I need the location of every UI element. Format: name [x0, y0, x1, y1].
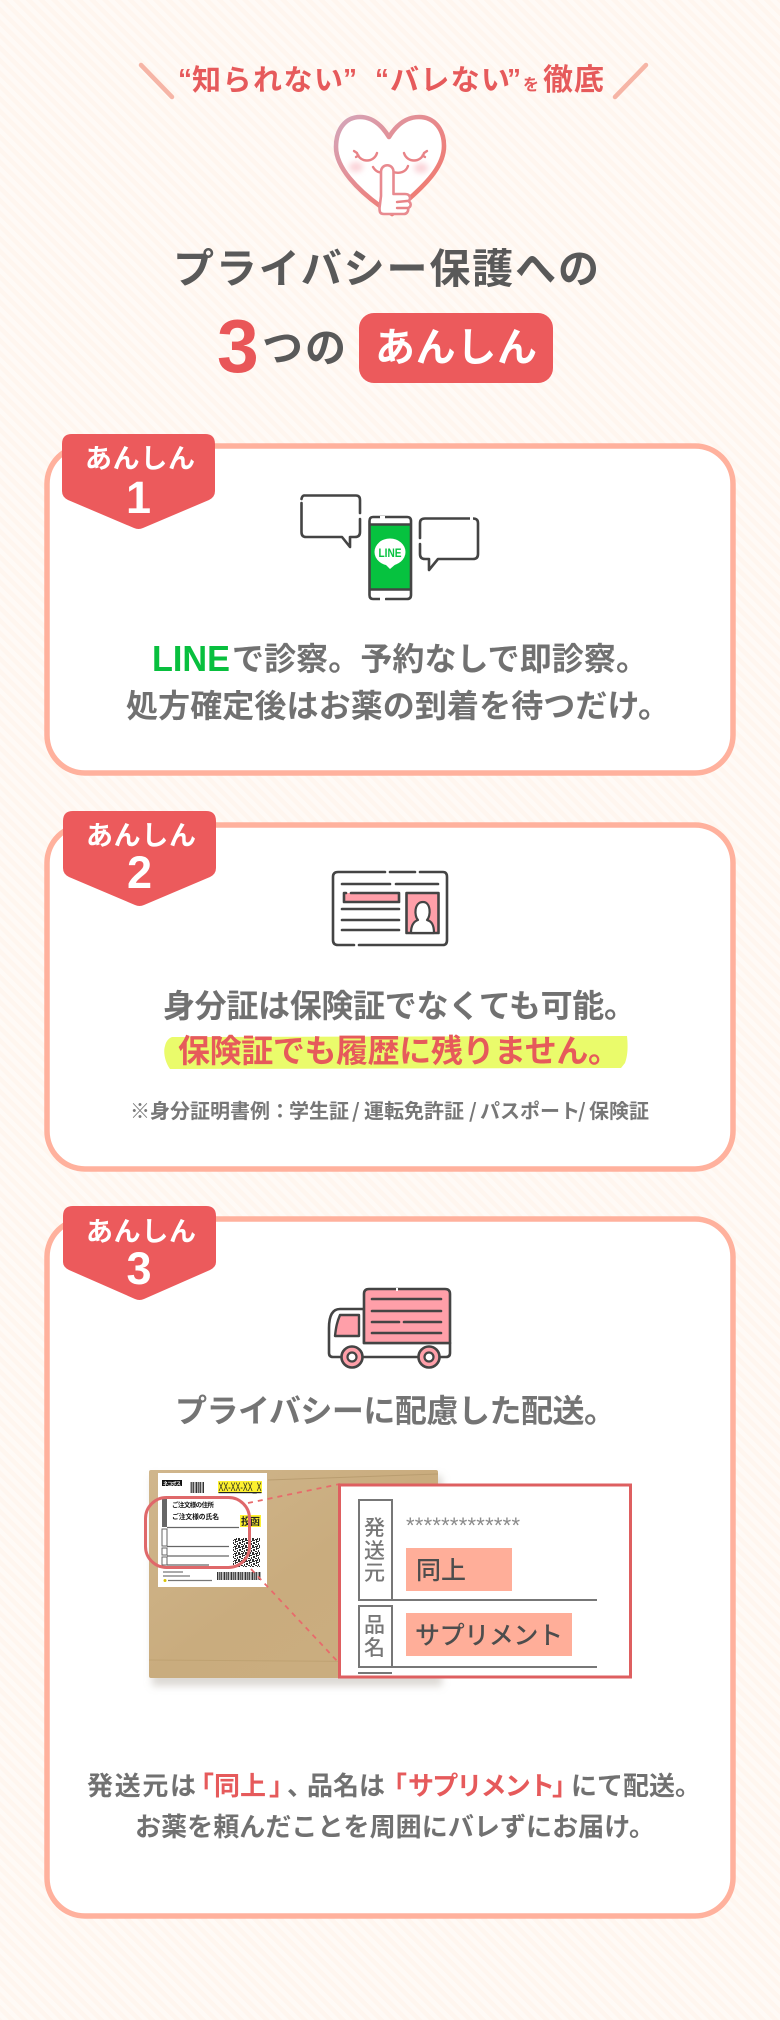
text: プライバシーに配慮: プライバシーに配慮した配送。	[175, 1386, 616, 1432]
icon: ID card	[333, 872, 447, 945]
tagline text	[178, 55, 604, 99]
icon: heart with shush face	[336, 117, 444, 214]
badge 1	[62, 434, 215, 529]
truck cargo	[364, 1289, 450, 1343]
text: 発送元は同上: サプリメント	[408, 1766, 553, 1803]
note: 身分証明書例: /	[578, 1095, 586, 1124]
main title	[173, 235, 599, 388]
shipping label: ご注文様の住所	[172, 1499, 214, 1509]
text: 発送元は同上: 品名は	[307, 1766, 385, 1803]
badge 3: 3	[126, 1243, 152, 1294]
truck wheels	[342, 1346, 362, 1368]
icon: LINE chat phone: LINE	[378, 546, 402, 560]
sender value 同上	[406, 1548, 512, 1591]
item label	[359, 1606, 392, 1667]
note: 身分証明書例: 運転免許証	[364, 1095, 464, 1124]
badge 2	[63, 811, 216, 906]
icon: LINE chat phone	[302, 496, 478, 600]
note: 身分証明書例: ※身分証明書例：	[130, 1095, 290, 1124]
decorative slash right	[615, 65, 646, 97]
shipping label	[158, 1473, 267, 1587]
text: 発送元は同上: 」	[269, 1766, 295, 1803]
pill: あんしん: あんしん	[375, 315, 537, 373]
text: 処方確定後: 処方確定後はお薬の到着を待つだけ。	[126, 681, 670, 727]
tagline text: ”	[343, 63, 357, 94]
title number 3: 3	[217, 304, 259, 388]
right speech bubble	[420, 518, 478, 570]
text: LINE診察: で診察。予約なしで即診察。	[232, 634, 648, 680]
sender label: 元	[364, 1557, 385, 1587]
text: 発送元は同上: 、	[287, 1766, 313, 1803]
badge 2: 2	[127, 847, 152, 898]
pill: あんしん	[359, 313, 553, 383]
LINE logo	[374, 538, 406, 566]
dashed callout lines	[248, 1484, 340, 1663]
shipping label: ネコポス	[163, 1480, 181, 1488]
text: 発送元は同上: 」	[552, 1766, 578, 1803]
truck window	[335, 1315, 359, 1336]
sender label	[359, 1500, 392, 1600]
tagline text: ”	[507, 63, 521, 94]
panel: あんしん 3	[47, 1206, 733, 1916]
shipping label: 投函	[241, 1513, 260, 1528]
panel: あんしん 2	[47, 811, 733, 1169]
note: 身分証明書例: パスポート	[480, 1095, 580, 1124]
tagline text: を	[523, 71, 539, 95]
detail box	[340, 1485, 630, 1677]
tagline text: 徹底	[543, 55, 604, 99]
tagline text: “	[375, 63, 389, 94]
note: 身分証明書例: 保険証	[589, 1095, 649, 1124]
item value サプリメント: サプリメント	[415, 1616, 563, 1652]
shipping label: ご注文様の氏名	[172, 1511, 219, 1521]
red callout ring	[146, 1498, 250, 1568]
text: お薬を頼んだこと: お薬を頼んだことを周囲にバレずにお届け。	[135, 1807, 655, 1844]
sender label: 送	[364, 1535, 385, 1565]
badge 3: あんしん	[86, 1210, 196, 1249]
decorative slash left	[141, 65, 172, 97]
highlighted text: 保険証でも履歴に残りません。	[178, 1026, 620, 1072]
text: 発送元は同上: 発送元は	[87, 1766, 196, 1803]
sender value 同上: 同上	[416, 1551, 466, 1587]
sender label: 発	[364, 1512, 385, 1542]
text: 発送元は同上: にて配送。	[571, 1766, 701, 1803]
masked sender name: *************	[406, 1513, 520, 1538]
header tagline	[141, 55, 646, 99]
text: 発送元は同上: 「	[381, 1766, 407, 1803]
text: 発送元は同上: 「	[188, 1766, 214, 1803]
badge 3	[63, 1206, 216, 1300]
item label: 品	[364, 1609, 385, 1639]
icon: truck	[329, 1288, 450, 1368]
text: 身分証: 身分証は保険証でなくても可能。	[163, 981, 636, 1027]
note: 身分証明書例: /	[469, 1095, 477, 1124]
panel: あんしん 1	[47, 434, 733, 773]
title line 1: プライバシー保護への	[173, 235, 599, 295]
text: 発送元は同上: 同上	[214, 1766, 266, 1803]
envelope	[149, 1470, 442, 1686]
truck body	[329, 1309, 450, 1357]
illustration: envelope and label	[146, 1470, 630, 1686]
note: 身分証明書例: 学生証	[289, 1095, 349, 1124]
tagline text: バレない	[390, 57, 510, 99]
tagline text: 知られない	[192, 57, 343, 99]
badge 1: あんしん	[85, 437, 195, 476]
tagline text: “	[178, 63, 192, 94]
shipping label: XX-XX-XX_X	[218, 1480, 262, 1494]
note: 身分証明書例: /	[352, 1095, 360, 1124]
badge 1: 1	[126, 472, 151, 523]
phone	[370, 525, 410, 589]
title つの: つの	[262, 314, 346, 374]
item label: 名	[364, 1632, 385, 1662]
text: LINE診察: LINE	[152, 638, 230, 679]
left speech bubble	[302, 496, 360, 547]
badge 2: あんしん	[86, 814, 196, 853]
